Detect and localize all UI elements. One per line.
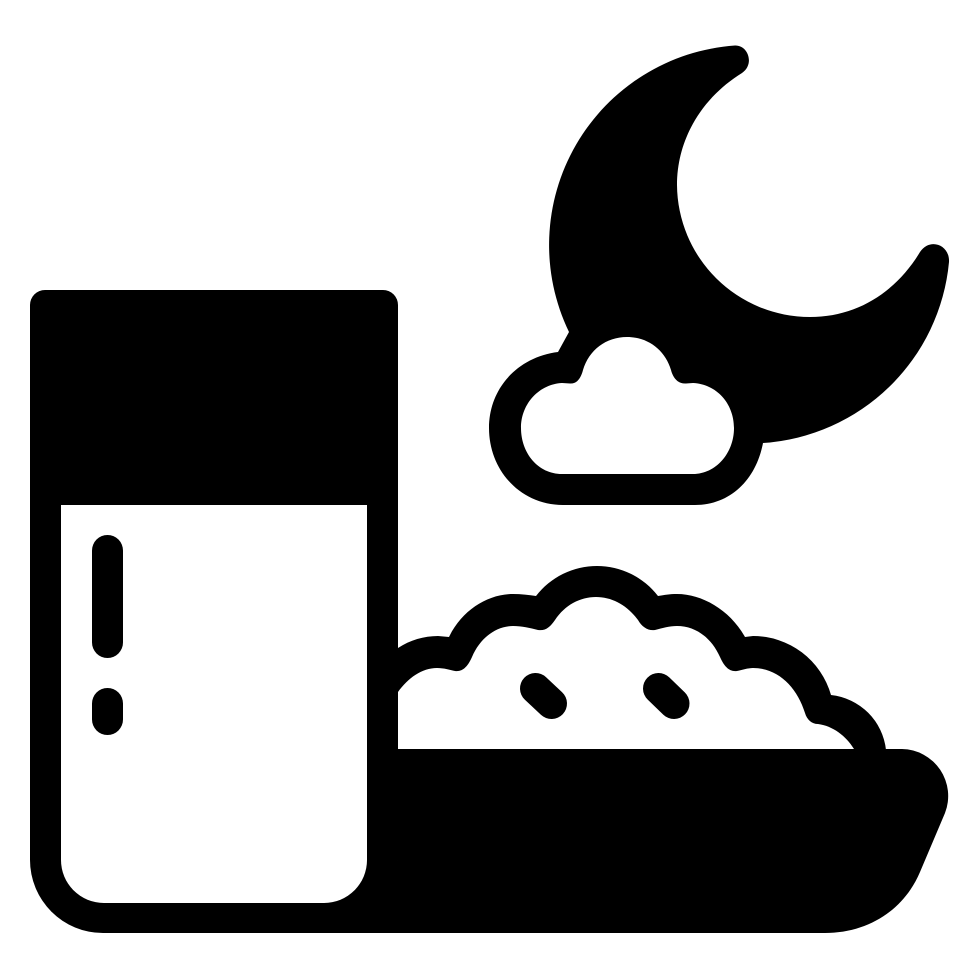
rice mound fill xyxy=(398,597,854,749)
icon: crescent moon xyxy=(549,45,949,443)
icon: cloud xyxy=(489,330,763,505)
rice grain right xyxy=(658,688,674,704)
icon: glass xyxy=(30,290,398,933)
rice grain left xyxy=(536,688,552,704)
glass highlight short xyxy=(92,688,123,735)
icon: rice bowl xyxy=(320,566,948,933)
glass milk fill xyxy=(61,505,367,903)
glass highlight long xyxy=(92,535,123,658)
rice mound outline xyxy=(398,566,886,770)
bowl body xyxy=(320,749,948,933)
